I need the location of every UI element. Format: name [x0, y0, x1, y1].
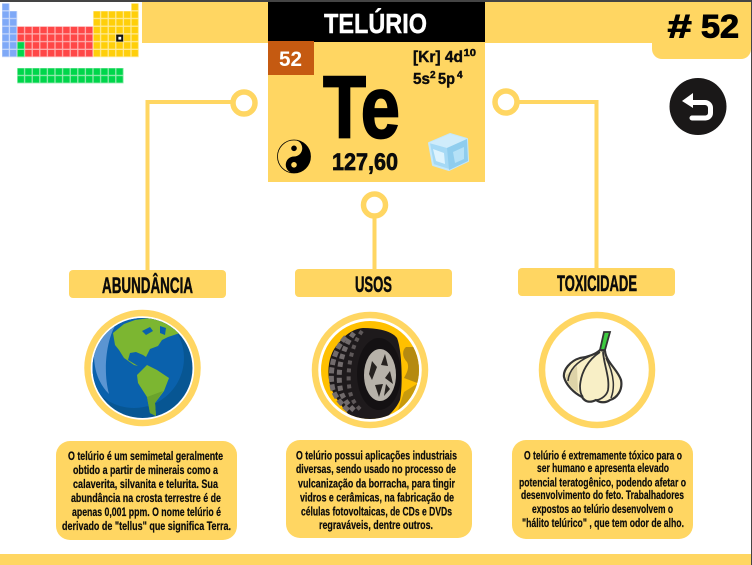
heading: abundance	[69, 270, 226, 298]
icon: tire	[315, 315, 425, 425]
back button	[670, 78, 726, 135]
text block: uses: regraváveis, dentre outros.	[319, 518, 433, 532]
text block: uses: vidros e cerâmicas, na fabricação de	[300, 490, 454, 504]
text block: toxicity: O telúrio é extremamente tóxico para o	[524, 448, 682, 462]
periodic table locator	[2, 3, 139, 83]
element name: TELÚRIO	[324, 8, 427, 39]
text block: uses: O telúrio possui aplicações industriais	[296, 448, 457, 462]
atomic number: 52	[279, 48, 302, 71]
atomic number	[268, 41, 314, 75]
heading: uses	[295, 269, 452, 297]
icon: garlic	[542, 315, 652, 425]
text block: toxicity: potencial teratogênico, podendo afetar o	[519, 476, 686, 490]
heading: abundance: ABUNDÂNCIA	[102, 273, 193, 298]
number tab: 52	[701, 8, 739, 44]
element name	[268, 2, 485, 42]
element symbol: Te	[323, 58, 400, 156]
node: uses	[364, 194, 386, 216]
text block: uses	[286, 440, 472, 538]
bottom banner	[0, 554, 751, 565]
icon: yin yang	[278, 140, 310, 173]
connector: abundance	[148, 102, 232, 270]
text block: uses: células fotovoltaicas, de CDs e DVDs	[301, 504, 452, 518]
electron configuration: 2	[430, 70, 436, 81]
column: abundance	[56, 270, 237, 540]
atomic mass: 127,60	[332, 149, 398, 176]
text block: abundance: derivado de "tellus" que significa Terra.	[62, 519, 231, 533]
text block: abundance: obtido a partir de minerais como a	[73, 463, 218, 477]
node: toxicity	[495, 91, 517, 113]
text block: abundance: abundância na crosta terrestre é de	[71, 491, 221, 505]
electron configuration: 10	[464, 48, 476, 59]
node: abundance	[233, 92, 255, 114]
connector: uses	[372, 217, 376, 269]
text block: toxicity	[512, 440, 693, 539]
number tab: #	[667, 8, 691, 44]
text block: toxicity: "hálito telúrico" , que tem odor de alho.	[522, 516, 684, 530]
text block: toxicity: desenvolvimento do feto. Trabalhadores	[521, 488, 684, 502]
text block: toxicity: ser humano e apresenta elevado	[537, 461, 669, 475]
heading: uses: USOS	[355, 272, 392, 297]
text block: uses: diversas, sendo usado no processo de	[296, 462, 456, 476]
electron configuration	[413, 48, 476, 88]
text block: abundance: apenas 0,001 ppm. O nome telúrio é	[72, 505, 221, 519]
heading: toxicity: TOXICIDADE	[557, 271, 637, 296]
heading: toxicity	[518, 268, 675, 296]
number tab	[652, 8, 751, 59]
text block: uses: vulcanização da borracha, para tingir	[298, 476, 455, 490]
text block: toxicity: expostos ao telúrio desenvolvem o	[532, 502, 673, 516]
tellurium marker	[116, 35, 123, 42]
icon: globe	[84, 308, 198, 423]
text block: abundance: calaverita, silvanita e telurita. Sua	[73, 477, 218, 491]
column: uses	[286, 269, 472, 538]
electron configuration: 5p	[438, 71, 455, 88]
text block: abundance	[56, 441, 237, 540]
element card	[268, 2, 485, 182]
connector: toxicity	[518, 102, 596, 268]
electron configuration: 5s	[413, 71, 430, 88]
top banner	[142, 2, 751, 43]
text block: abundance: O telúrio é um semimetal geralmente	[68, 449, 223, 463]
electron configuration: [Kr] 4d	[413, 49, 463, 66]
electron configuration: 4	[457, 70, 463, 81]
column: toxicity	[512, 268, 693, 539]
icon: ice cube	[429, 134, 468, 170]
